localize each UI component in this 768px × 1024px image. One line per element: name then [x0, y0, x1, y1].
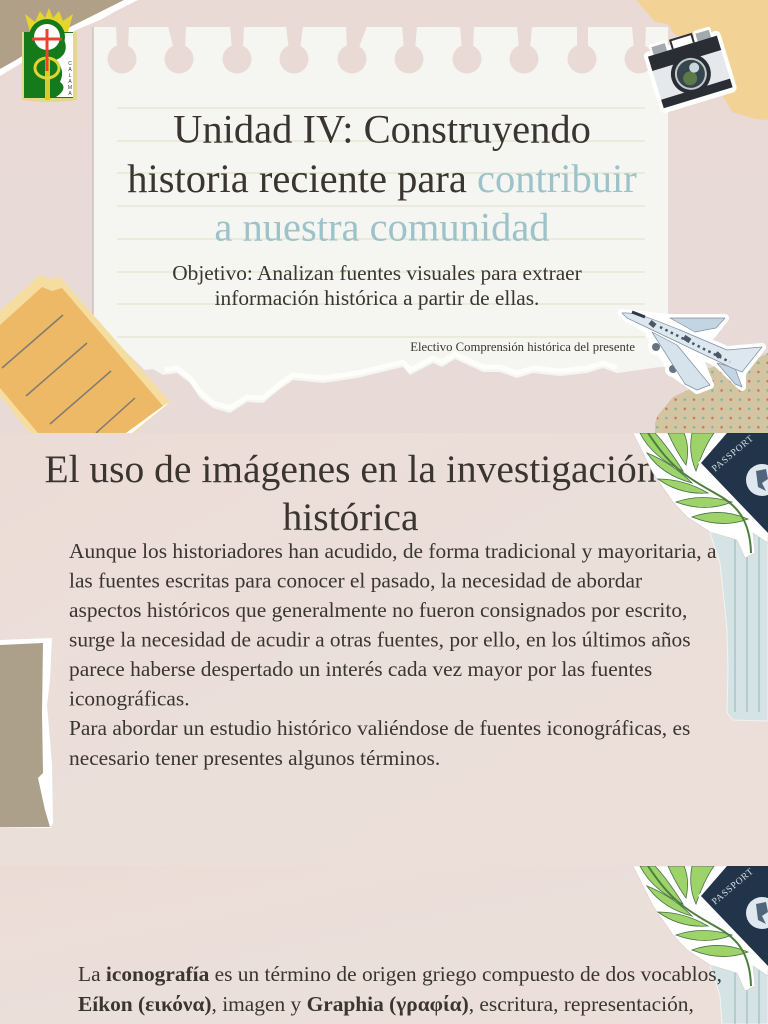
panel: torn brown paper left [0, 638, 53, 828]
binder holes [108, 26, 654, 74]
panel: blue lined paper right [710, 530, 768, 721]
title: Unidad IV: Construyendo [173, 106, 591, 152]
panel: blue lined paper slide 3 [710, 963, 768, 1024]
body text: slide 3 [78, 962, 722, 1016]
orange torn paper top right [636, 0, 768, 120]
slide 3 background [0, 866, 768, 1024]
school crest logo [22, 8, 77, 102]
body text: slide 2: Para abordar un estudio histórico valiéndose de fuentes iconográficas, es [69, 716, 690, 740]
body text: slide 2: necesario tener presentes algunos términos. [69, 746, 440, 770]
title [127, 106, 637, 250]
title: a nuestra comunidad [214, 204, 550, 250]
school crest logo: M [68, 85, 72, 91]
ruled lines [117, 108, 645, 337]
heading: slide 2: histórica [282, 495, 419, 539]
course label: Electivo Comprensión histórica del presente [410, 340, 635, 354]
objective text: Objetivo: Analizan fuentes visuales para extraer [172, 261, 582, 285]
heading: slide 2 [44, 447, 657, 539]
body text: slide 2: las fuentes escritas para conocer el pasado, la necesidad de abordar [69, 568, 642, 592]
body text: slide 2: Aunque los historiadores han acudido, de forma tradicional y mayoritaria, a [69, 539, 717, 563]
slide 2 background [0, 433, 768, 866]
school crest logo: A [68, 79, 72, 85]
school crest logo: L [69, 73, 72, 79]
title: historia reciente para contribuir [127, 156, 637, 201]
slide 1 background [0, 0, 768, 433]
body text: slide 2: surge la necesidad de acudir a otras fuentes, por ello, en los últimos años [69, 628, 691, 652]
heading: slide 2: El uso de imágenes en la investigación [44, 447, 657, 491]
body text: slide 3: Eíkon (εικόνα), imagen y Graphia (γραφία), escritura, representación, [78, 992, 694, 1016]
body text: slide 3: La iconografía es un término de origen griego compuesto de dos vocablos, [78, 962, 722, 986]
objective text [172, 261, 582, 310]
torn brown paper corner [0, 0, 138, 76]
body text: slide 2: aspectos históricos que generalmente no fueron consignados por escrito, [69, 598, 687, 622]
school crest logo: C [68, 61, 72, 67]
icon: airplane sticker [622, 312, 762, 390]
school crest logo: A [68, 67, 72, 73]
icon: leaf and passport slide 3 [633, 866, 768, 991]
notebook paper [93, 26, 668, 413]
objective text: información histórica a partir de ellas. [215, 286, 539, 310]
dotted paper bottom right [655, 353, 768, 433]
body text: slide 2 [69, 539, 717, 770]
school crest logo: A [68, 91, 72, 97]
icon: camera sticker [641, 24, 738, 114]
icon: leaf and passport slide 2 [633, 433, 768, 558]
ticket stub [0, 275, 170, 433]
body text: slide 2: iconográficas. [69, 686, 190, 710]
body text: slide 2: parece haberse despertado un interés cada vez mayor por las fuentes [69, 657, 652, 681]
